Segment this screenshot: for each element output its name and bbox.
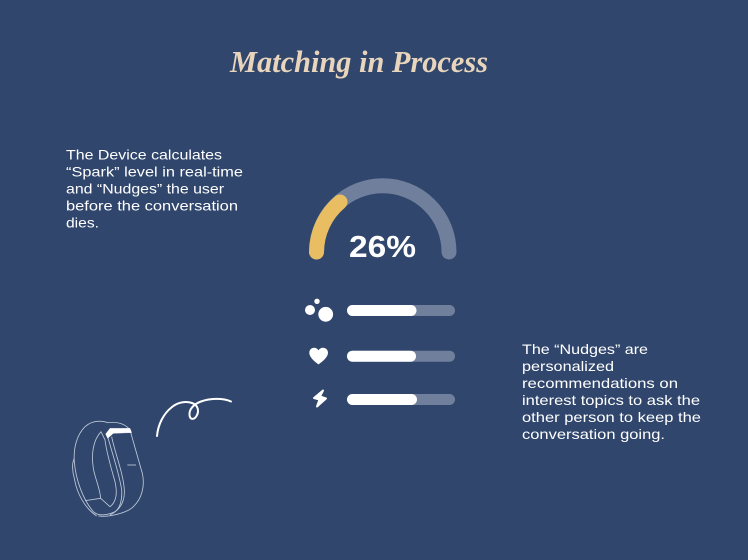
text block: nudges explanation: The “Nudges” are bbox=[522, 341, 648, 357]
icon: wristband device bbox=[73, 421, 143, 516]
text block: device explanation: and “Nudges” the user bbox=[66, 180, 224, 196]
text block: nudges explanation: recommendations on bbox=[522, 375, 678, 391]
icon: lightning bolt bbox=[314, 390, 326, 406]
text block: device explanation bbox=[66, 146, 243, 230]
text block: device explanation: The Device calculates bbox=[66, 146, 222, 162]
gauge percentage: 26% bbox=[349, 229, 416, 264]
text block: nudges explanation: conversation going. bbox=[522, 426, 665, 442]
bar: heart metric bbox=[347, 351, 455, 362]
text block: nudges explanation: personalized bbox=[522, 358, 614, 374]
text block: device explanation: “Spark” level in real-time bbox=[66, 164, 243, 180]
icon: bubbles bbox=[305, 299, 333, 322]
icon: heart bbox=[309, 348, 328, 364]
text block: device explanation: dies. bbox=[66, 214, 99, 230]
gauge value arc bbox=[316, 202, 340, 252]
text block: nudges explanation: other person to keep the bbox=[522, 409, 701, 425]
curl line bbox=[157, 399, 231, 436]
bar: bubbles metric bbox=[347, 305, 455, 316]
text block: nudges explanation bbox=[522, 341, 701, 442]
gauge track bbox=[316, 186, 449, 252]
bar: energy metric bbox=[347, 394, 455, 405]
text block: nudges explanation: interest topics to ask the bbox=[522, 392, 700, 408]
text block: device explanation: before the conversation bbox=[66, 198, 238, 214]
title: Matching in Process bbox=[229, 44, 488, 79]
device band highlight bbox=[106, 428, 132, 438]
gauge: spark level bbox=[316, 186, 449, 264]
